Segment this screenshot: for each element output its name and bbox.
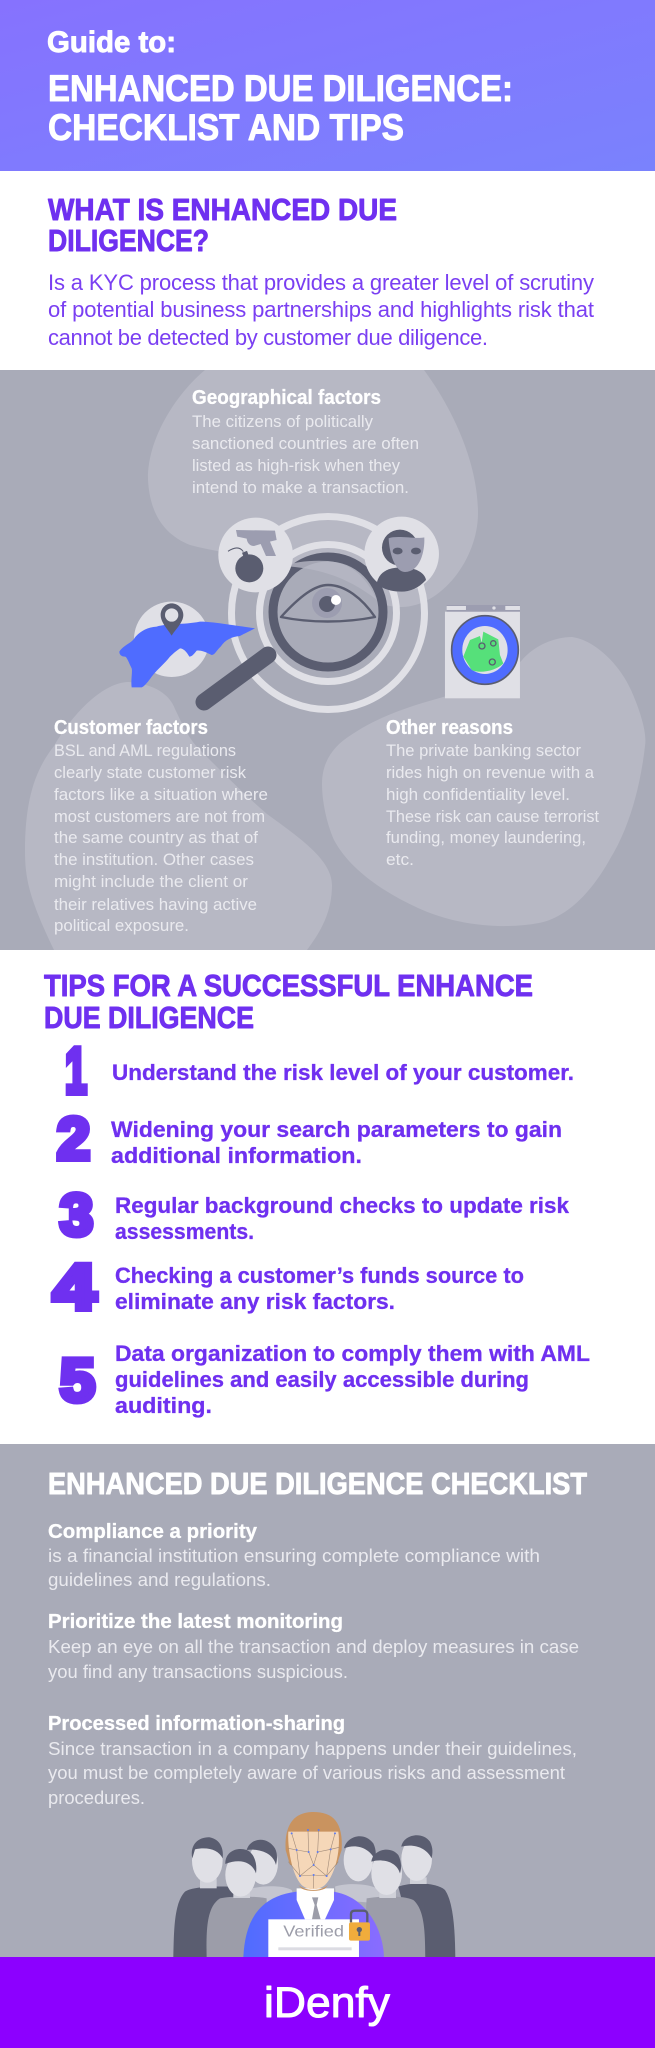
checklist item: monitoring: you find any transactions suspicious. — [48, 1662, 348, 1682]
heading: tips: DUE DILIGENCE — [44, 1000, 254, 1035]
text block: customer factors: the institution. Other cases — [54, 850, 254, 869]
tip 5 — [60, 1341, 590, 1418]
heading: what is EDD — [48, 192, 397, 258]
text block: other reasons: etc. — [386, 850, 414, 869]
text block: geographical factors: The citizens of politically — [192, 412, 373, 431]
back center right person — [335, 1836, 380, 1903]
text block: geographical factors — [192, 387, 419, 497]
back center left person — [247, 1840, 297, 1903]
tip 4 — [53, 1251, 524, 1323]
checklist item: information sharing: Since transaction in a company happens under their guidelines, — [48, 1739, 577, 1759]
main person — [243, 1812, 384, 1957]
footer: iDenfy logo — [0, 1957, 655, 2048]
tip 5: Data organization to comply them with AML — [115, 1341, 590, 1366]
checklist item: information sharing: you must be completely aware of various risks and assessment — [48, 1763, 565, 1783]
tip 2: additional information. — [111, 1143, 362, 1168]
text block: other reasons: funding, money laundering, — [386, 828, 586, 847]
icon: masked person — [364, 517, 439, 592]
illustration: magnifying glass with eye — [204, 516, 424, 710]
panel: what is enhanced due diligence — [48, 192, 594, 350]
verified card with lock — [268, 1911, 370, 1957]
front left person — [206, 1849, 267, 1957]
tip 5: auditing. — [115, 1393, 212, 1418]
panel: header banner — [0, 0, 655, 171]
tip 1: Understand the risk level of your customer. — [112, 1060, 574, 1085]
text block: other reasons: high confidentiality level. — [386, 785, 570, 804]
heading: what is EDD: WHAT IS ENHANCED DUE — [48, 192, 397, 227]
text block: other reasons: The private banking sector — [386, 741, 581, 760]
tip 4: eliminate any risk factors. — [115, 1289, 395, 1314]
heading: what is EDD: DILIGENCE? — [48, 223, 209, 258]
checklist item: compliance: guidelines and regulations. — [48, 1570, 271, 1590]
tip 2: 2 — [57, 1106, 90, 1172]
tip 1 — [65, 1034, 574, 1107]
tip 3 — [60, 1183, 569, 1248]
text block: geographical factors: intend to make a transaction. — [192, 478, 409, 497]
text block: customer factors: their relatives having active — [54, 895, 257, 914]
tip 1: 1 — [65, 1034, 87, 1107]
title — [48, 68, 513, 148]
blob: customer — [25, 682, 332, 950]
heading: guide to: Guide to: — [47, 26, 176, 59]
heading: checklist: ENHANCED DUE DILIGENCE CHECKLIST — [48, 1466, 587, 1501]
tip 2 — [57, 1106, 562, 1172]
blob: other reasons — [322, 637, 645, 926]
checklist item: compliance — [48, 1521, 540, 1590]
tip 5: guidelines and easily accessible during — [115, 1367, 529, 1392]
text block: customer factors: most customers are not from — [54, 807, 265, 826]
back right person — [398, 1835, 455, 1957]
panel: tips — [44, 968, 590, 1418]
checklist item: compliance: Compliance a priority — [48, 1521, 258, 1543]
panel: checklist — [0, 1444, 655, 1958]
text block: customer factors: clearly state customer risk — [54, 763, 246, 782]
text block: customer factors: political exposure. — [54, 916, 189, 935]
text block: other reasons: rides high on revenue with a — [386, 763, 595, 782]
tip 3: Regular background checks to update risk — [115, 1193, 569, 1218]
icon: washing machine with money — [445, 605, 520, 698]
checklist item: monitoring: Prioritize the latest monitoring — [48, 1611, 343, 1633]
tip 3: assessments. — [115, 1219, 254, 1244]
back left person — [173, 1837, 235, 1957]
front right person — [363, 1850, 425, 1957]
text block: customer factors — [54, 717, 268, 935]
text block: definition: cannot be detected by customer due diligence. — [48, 325, 488, 350]
tip 5: 5 — [60, 1347, 95, 1414]
heading: tips — [44, 968, 533, 1035]
icon: gun and bomb — [218, 518, 293, 592]
checklist item: information sharing — [48, 1713, 577, 1808]
text block: geographical factors: Geographical factors — [192, 387, 381, 409]
checklist item: compliance: is a financial institution ensuring complete compliance with — [48, 1546, 540, 1566]
text block: customer factors: BSL and AML regulations — [54, 741, 236, 760]
tip 2: Widening your search parameters to gain — [111, 1117, 562, 1142]
tip 3: 3 — [60, 1183, 93, 1248]
tip 4: Checking a customer’s funds source to — [115, 1263, 524, 1288]
checklist item: monitoring: Keep an eye on all the transaction and deploy measures in case — [48, 1637, 579, 1657]
checklist item: information sharing: Processed information-sharing — [48, 1713, 345, 1735]
text block: customer factors: might include the client or — [54, 872, 248, 891]
text block: geographical factors: sanctioned countries are often — [192, 434, 419, 453]
title: CHECKLIST AND TIPS — [48, 107, 404, 148]
illustration: verified person among crowd — [173, 1812, 455, 1957]
checklist item: monitoring — [48, 1611, 579, 1682]
verified card with lock: Verified — [283, 1924, 344, 1941]
icon: world map with pin — [119, 602, 255, 687]
text block: definition: of potential business partnerships and highlights risk that — [48, 297, 594, 322]
text block: customer factors: Customer factors — [54, 717, 208, 739]
text block: definition: Is a KYC process that provides a greater level of scrutiny — [48, 270, 594, 295]
text block: customer factors: the same country as that of — [54, 828, 258, 847]
text block: other reasons: Other reasons — [386, 717, 513, 739]
footer: iDenfy logo: iDenfy — [264, 1979, 391, 2027]
tip 4: 4 — [53, 1251, 96, 1323]
text block: geographical factors: listed as high-risk when they — [192, 456, 400, 475]
text block: definition — [48, 270, 594, 350]
text block: other reasons: These risk can cause terrorist — [386, 807, 599, 826]
panel: risk factors — [0, 370, 655, 950]
checklist item: information sharing: procedures. — [48, 1788, 145, 1808]
heading: tips: TIPS FOR A SUCCESSFUL ENHANCE — [44, 968, 533, 1003]
title: ENHANCED DUE DILIGENCE: — [48, 68, 513, 109]
text block: other reasons — [386, 717, 599, 869]
text block: customer factors: factors like a situation where — [54, 785, 268, 804]
blob: geographical — [148, 370, 478, 607]
